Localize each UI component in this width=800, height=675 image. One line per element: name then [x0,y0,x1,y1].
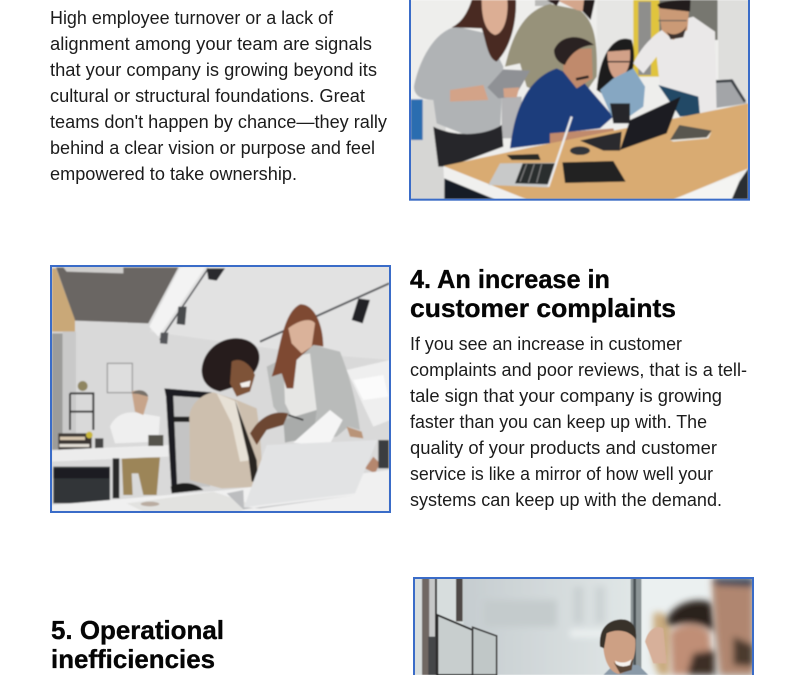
text block: team alignment paragraph: that your company is growing beyond its [50,60,377,80]
photo: team gathered around laptops at a table [409,0,750,201]
left wall column [52,333,63,453]
heading: point 4: customer complaints [410,293,676,323]
shelf [70,393,93,430]
text block: team alignment paragraph: teams don't happen by chance—they rally [50,112,387,132]
text block: team alignment paragraph [50,8,387,184]
ceiling [56,267,178,323]
table [443,103,748,199]
left woman [414,27,503,137]
smiling man [603,665,648,675]
text block: customer complaints paragraph: complaints and poor reviews, that is a tell- [410,360,747,380]
seated man [510,68,613,148]
laptop [244,440,377,507]
silver laptop [488,163,556,187]
text block: customer complaints paragraph: If you see an increase in customer [410,334,682,354]
text block: team alignment paragraph: empowered to take ownership. [50,164,297,184]
photo: smiling coworkers in a bright office [413,577,754,675]
front desk [52,470,389,512]
blond woman [653,612,672,675]
text block: team alignment paragraph: High employee turnover or a lack of [50,8,334,28]
mouse pad, mouse, phone [562,161,626,183]
hand at laptop [347,427,363,438]
dark laptop [620,97,681,150]
heading: point 4: 4. An increase in [410,264,610,294]
text block: team alignment paragraph: cultural or structural foundations. Great [50,86,365,106]
back woman [505,4,597,110]
text block: customer complaints paragraph: quality of your products and customer [410,438,717,458]
monitors [437,615,473,675]
track lights [260,283,389,342]
blurred man foreground [667,601,715,675]
text block: team alignment paragraph: alignment among your team are signals [50,34,372,54]
standing woman [267,345,360,442]
blurred man far right [712,578,753,675]
text block: customer complaints paragraph: service is like a mirror of how well your [410,464,713,484]
text block: team alignment paragraph: behind a clear vision or purpose and feel [50,138,375,158]
tablet [487,69,530,98]
text block: customer complaints paragraph: systems can keep up with the demand. [410,490,722,510]
text block: customer complaints paragraph: tale sign that your company is growing [410,386,722,406]
right man [633,17,717,115]
back man [110,412,160,443]
paper [293,410,343,447]
seated woman [189,392,263,488]
tablet on table right [670,125,712,140]
heading: point 5: inefficiencies [51,644,215,674]
photo: two colleagues reviewing a document at a laptop [50,265,391,513]
heading: point 4 [410,264,676,323]
heading: point 5: 5. Operational [51,615,224,645]
seated woman [597,39,634,97]
text block: customer complaints paragraph: faster than you can keep up with. The [410,412,707,432]
heading: point 5 [51,615,224,674]
desk back [52,445,168,462]
text block: customer complaints paragraph [410,334,747,510]
chair [172,397,210,487]
picture frame [107,363,132,393]
